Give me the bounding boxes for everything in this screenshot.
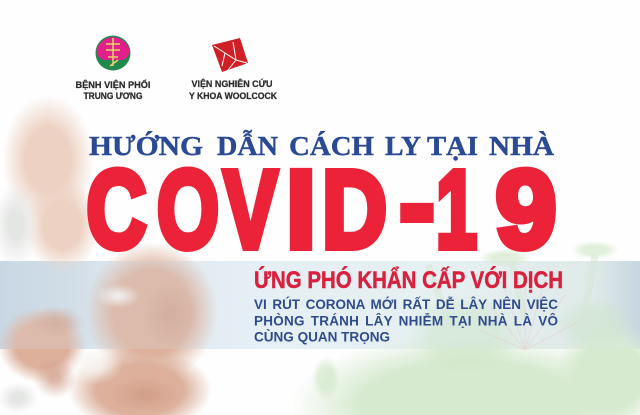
band tint overlay bbox=[0, 261, 640, 349]
heading: TẠI bbox=[427, 131, 478, 161]
title: COVID-19: D bbox=[322, 148, 387, 272]
heading: DẪN bbox=[217, 130, 279, 161]
heading: LY bbox=[385, 131, 421, 161]
heading: CÁCH bbox=[289, 131, 374, 161]
logo: Viện Nghiên cứu Y khoa Woolcock bbox=[189, 38, 277, 102]
heading: NHÀ bbox=[489, 131, 555, 161]
description text: VI RÚT CORONA MỚI RẤT DỄ LÂY NÊN VIỆC bbox=[254, 297, 558, 312]
information band bbox=[0, 261, 640, 349]
description text: CÙNG QUAN TRỌNG bbox=[254, 330, 390, 344]
logo text: BỆNH VIỆN PHỔI bbox=[76, 79, 151, 91]
heading bbox=[89, 130, 555, 161]
title: COVID-19: I bbox=[286, 148, 316, 272]
logo text: VIỆN NGHIÊN CỨU bbox=[192, 78, 273, 90]
logo: Bệnh viện Phổi Trung ương bbox=[76, 36, 151, 102]
title: COVID-19: 1 bbox=[436, 148, 477, 272]
title: COVID-19: C bbox=[86, 148, 146, 272]
title: COVID-19 bbox=[86, 142, 556, 272]
title: COVID-19: V bbox=[224, 148, 278, 272]
icon: hospital emblem bbox=[96, 36, 130, 70]
background: pink virus spikes bbox=[480, 268, 578, 350]
title: COVID-19: 9 bbox=[496, 148, 556, 272]
subheading: ỨNG PHÓ KHẨN CẤP VỚI DỊCH bbox=[254, 266, 563, 294]
title: COVID-19: O bbox=[157, 148, 219, 272]
description text: PHÒNG TRÁNH LÂY NHIỄM TẠI NHÀ LÀ VÔ bbox=[254, 314, 558, 328]
logo text: TRUNG ƯƠNG bbox=[84, 91, 142, 102]
title: COVID-19: - bbox=[400, 142, 434, 266]
heading: HƯỚNG bbox=[89, 131, 203, 161]
icon: red leaf square bbox=[212, 38, 248, 72]
description text bbox=[254, 297, 558, 344]
logo text: Y KHOA WOOLCOCK bbox=[189, 91, 277, 102]
